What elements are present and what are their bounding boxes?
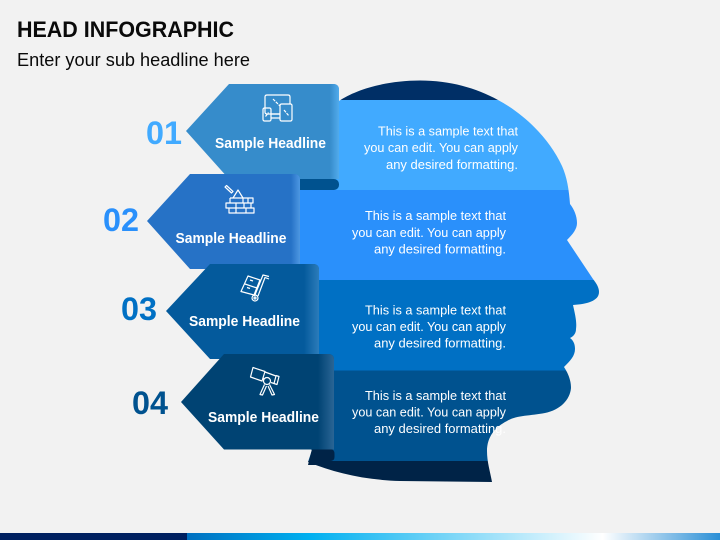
number 02: 02	[103, 202, 139, 238]
icon: devices	[263, 95, 292, 121]
panel 3 text: you can edit. You can apply	[352, 319, 506, 334]
panel 3 text: any desired formatting.	[374, 336, 506, 350]
panel 2 text	[352, 208, 506, 256]
panel 1 text	[364, 124, 518, 172]
tag 2 arrow	[147, 174, 300, 269]
panel 4 text: This is a sample text that	[365, 388, 506, 403]
number 01: 01	[146, 115, 182, 151]
tag 4 headline: Sample Headline	[208, 410, 319, 426]
head silhouette with colour bands	[300, 80, 599, 482]
tag 1 arrow	[186, 84, 339, 179]
tag 1 fold	[290, 179, 339, 190]
tag 2 headline: Sample Headline	[176, 231, 286, 247]
panel 1 text: This is a sample text that	[378, 124, 518, 138]
tag 4 curl	[308, 449, 334, 465]
tag 1 headline: Sample Headline	[215, 136, 326, 152]
icon: bricks and trowel	[225, 186, 254, 213]
icon: hand truck	[241, 275, 269, 301]
footer bar	[0, 533, 720, 540]
tag 3 headline: Sample Headline	[189, 314, 300, 330]
panel 3 text: This is a sample text that	[365, 302, 506, 318]
panel 4 text: you can edit. You can apply	[352, 404, 506, 420]
icon: telescope	[250, 368, 279, 395]
number 04: 04	[132, 385, 168, 421]
number 03: 03	[121, 291, 157, 327]
panel 2 text: any desired formatting.	[374, 242, 506, 256]
title: HEAD INFOGRAPHIC	[17, 17, 234, 42]
subtitle: Enter your sub headline here	[17, 50, 250, 70]
tag 3 arrow	[166, 264, 319, 359]
tag 4 arrow	[181, 354, 334, 450]
panel 1 text: any desired formatting.	[386, 157, 518, 172]
panel 2 text: This is a sample text that	[365, 208, 506, 223]
panel 3 text	[352, 302, 506, 350]
panel 2 text: you can edit. You can apply	[352, 225, 506, 240]
panel 4 text: any desired formatting.	[374, 421, 506, 436]
panel 1 text: you can edit. You can apply	[364, 140, 518, 155]
panel 4 text	[352, 388, 506, 436]
